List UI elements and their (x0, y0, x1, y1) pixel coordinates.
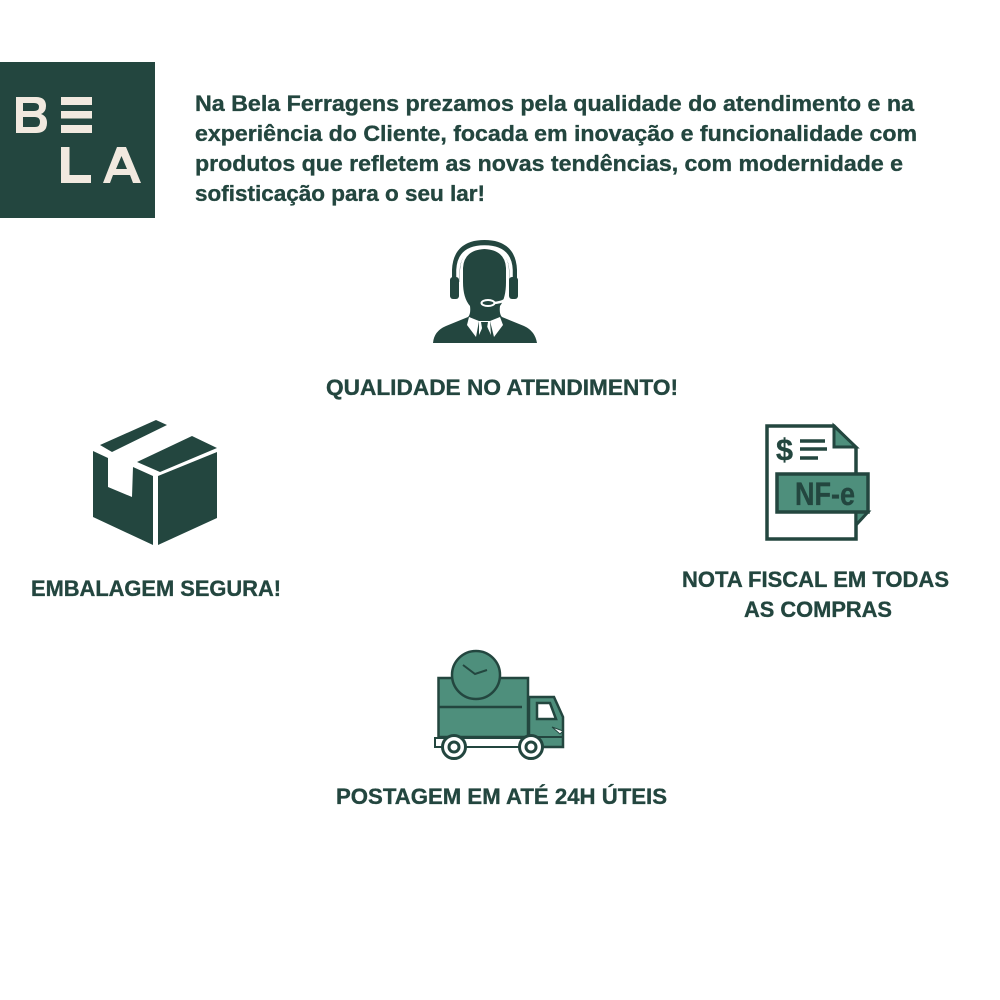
icon: NF-e invoice document: NF-e (795, 476, 855, 512)
heading: qualidade no atendimento: QUALIDADE NO ATENDIMENTO! (326, 375, 678, 400)
intro text: Na Bela Ferragens prezamos pela qualidade do atendimento e na (195, 91, 915, 116)
intro text: produtos que refletem as novas tendências, com modernidade e (195, 151, 903, 176)
heading: postagem: POSTAGEM EM ATÉ 24H ÚTEIS (336, 784, 667, 809)
heading: nota fiscal: AS COMPRAS (744, 597, 892, 622)
icon: NF-e invoice document: $ (776, 432, 793, 467)
heading: nota fiscal: NOTA FISCAL EM TODAS (682, 567, 949, 592)
heading: embalagem segura: EMBALAGEM SEGURA! (31, 576, 281, 601)
logo: BELA (0, 62, 155, 218)
icon: NF-e invoice document (767, 426, 868, 539)
intro text: sofisticação para o seu lar! (195, 181, 485, 206)
heading: nota fiscal (682, 567, 949, 622)
intro text (195, 91, 917, 206)
icon: cardboard box (93, 420, 217, 545)
icon: customer service agent with headset (433, 244, 537, 343)
icon: delivery truck with clock (435, 651, 563, 758)
intro text: experiência do Cliente, focada em inovação e funcionalidade com (195, 121, 917, 146)
